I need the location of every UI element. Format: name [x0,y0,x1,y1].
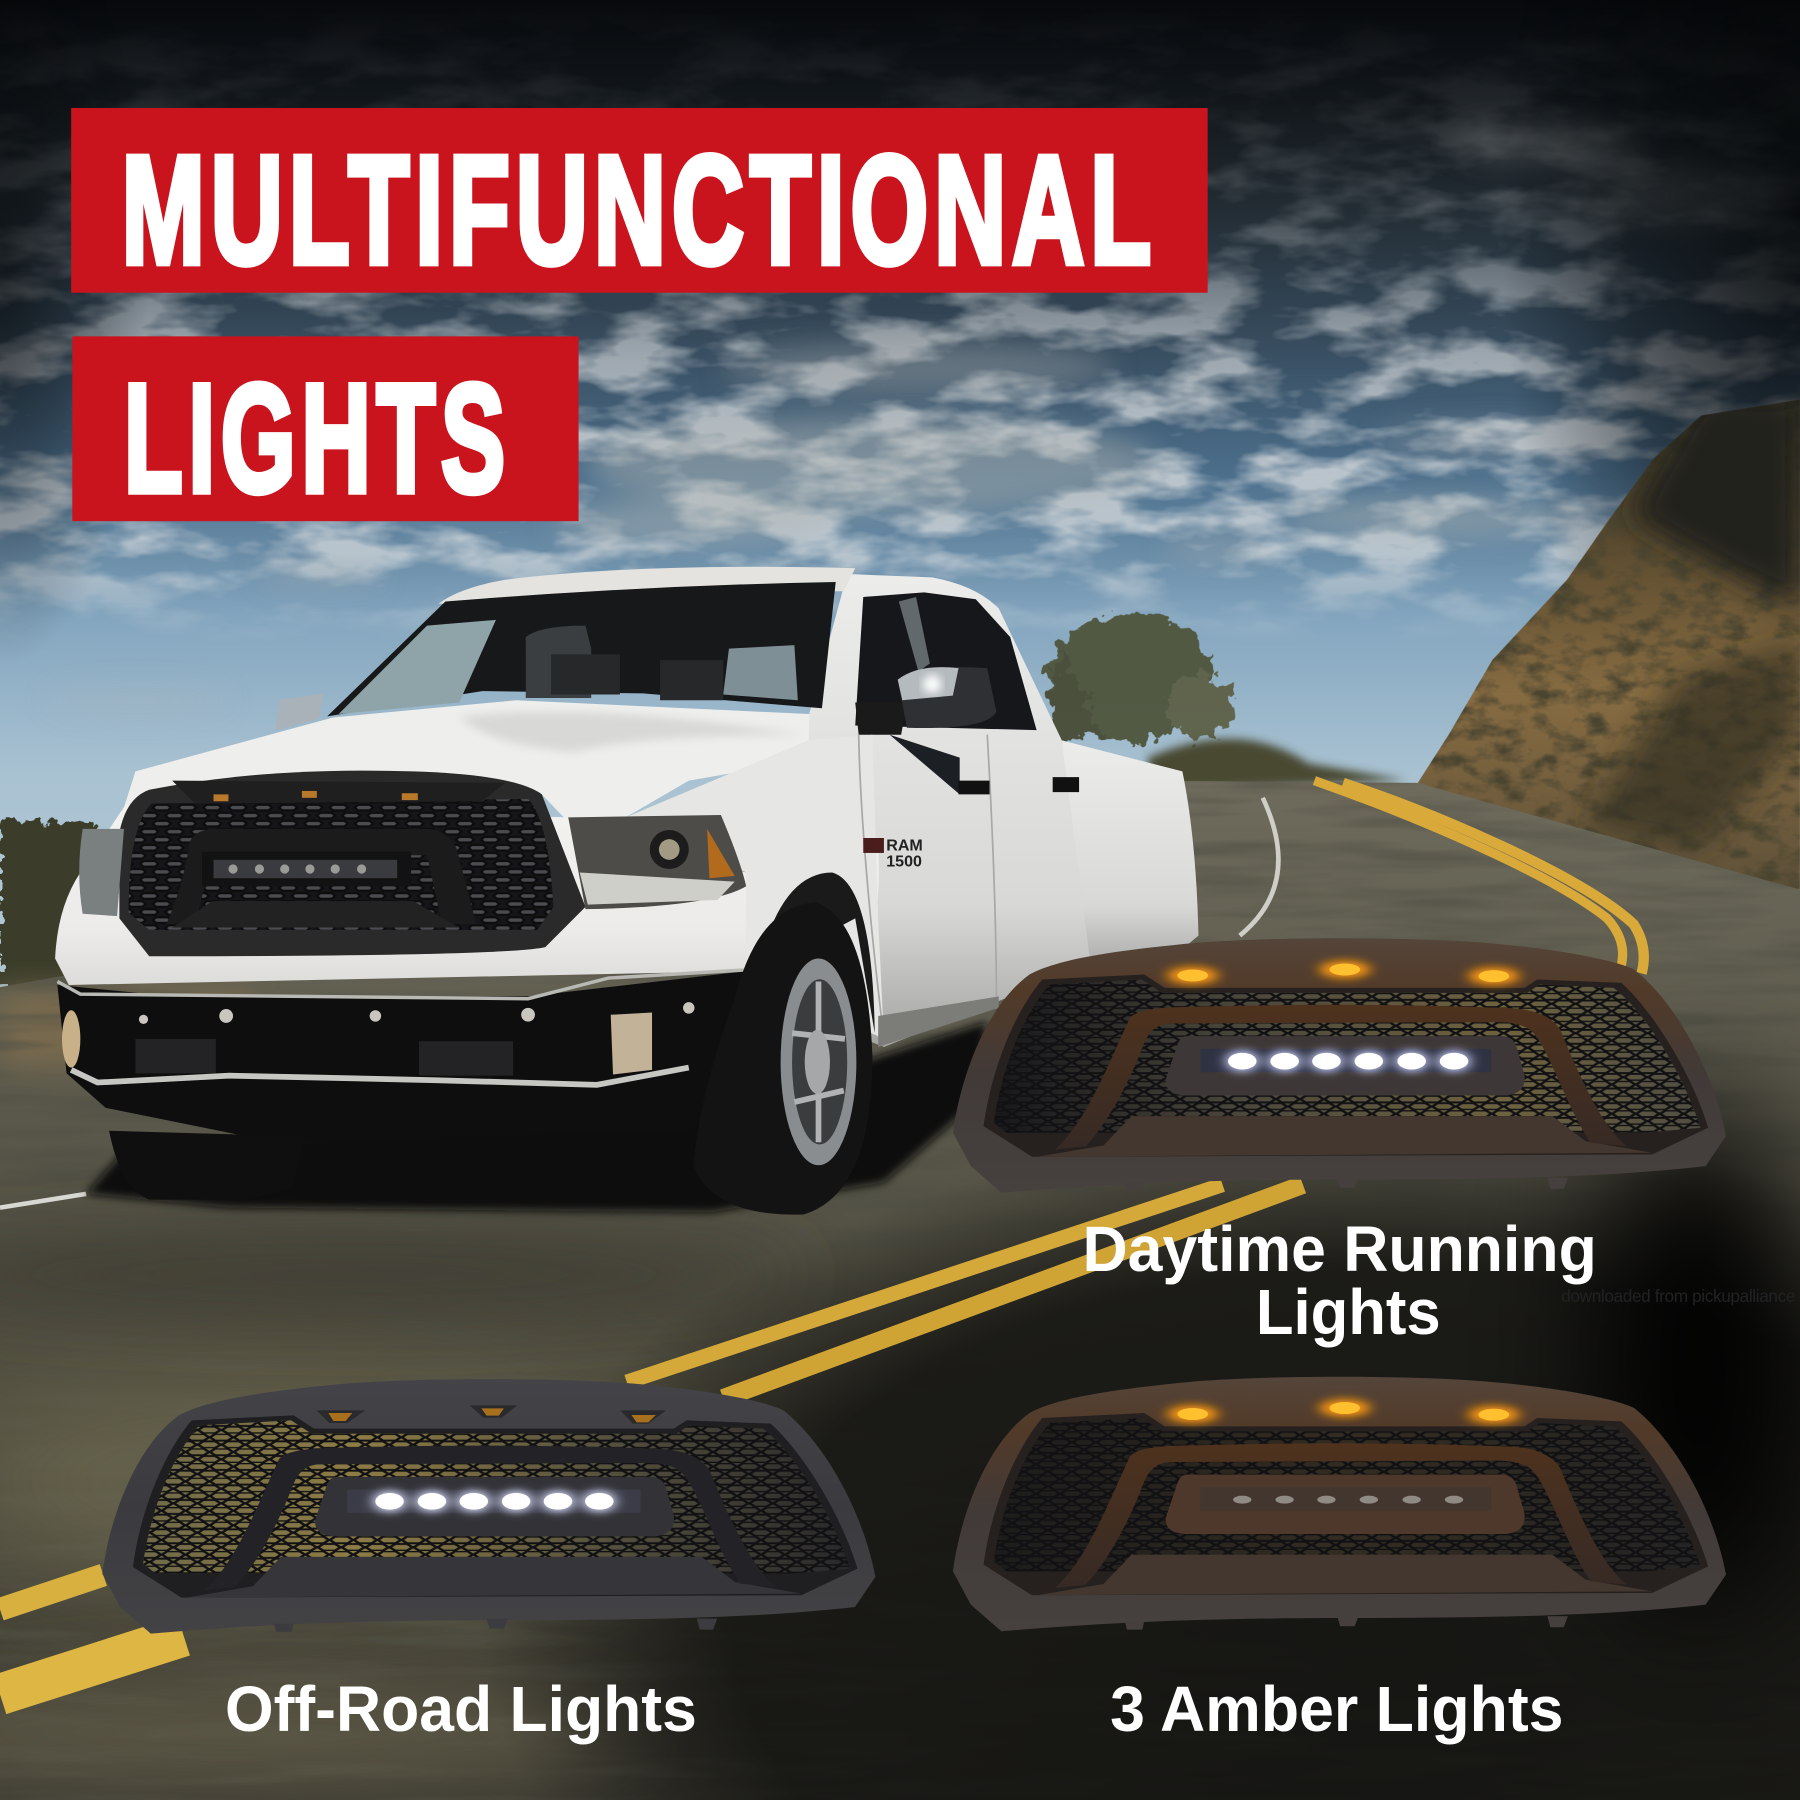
road lighting and shadows [0,1091,1800,1800]
unlit amber markers [317,1405,666,1424]
upper bar [172,781,505,804]
inner rim [984,1413,1708,1595]
honeycomb mesh [994,1418,1700,1571]
arch frame [1055,1443,1626,1588]
truck ground shadow [86,1022,987,1212]
truck grille [119,771,585,956]
sky [0,0,1800,1033]
grille mesh [129,799,553,930]
hood crease shading [459,712,804,752]
door shadow [890,735,960,794]
arch frame [1055,1005,1626,1149]
cab side [804,574,1091,1047]
left mirror [276,693,324,730]
inner arch [166,829,476,924]
side windows [855,592,1037,730]
windshield reflection [339,620,496,714]
lower bar [1037,1116,1652,1157]
grille: three amber lights [953,1377,1726,1631]
side mirror [855,667,996,735]
amber LEDs [1167,1399,1519,1423]
fender and door panels [626,735,884,1039]
white LEDs [373,1491,616,1512]
RAM 1500 badge: 1500 [886,853,922,871]
amber LEDs [1167,961,1519,985]
rear seats [551,654,723,700]
daytime running lights label: Lights [1256,1276,1441,1348]
grille surround [119,771,585,956]
distant trees [0,613,1406,993]
amber marker lights [214,791,418,801]
light housing, unlit [1166,1475,1525,1534]
RAM 1500 badge: RAM [886,837,923,855]
honeycomb mesh [994,980,1700,1133]
front panel [55,804,879,985]
asphalt texture [0,782,1800,1640]
hood [103,700,809,872]
lower valance [172,901,459,928]
inner rim [984,975,1708,1157]
off-road lights label: Off-Road Lights [225,1673,697,1745]
headlight [568,815,746,909]
windshield [327,582,836,716]
hillside [1418,400,1800,890]
clouds [0,54,1800,630]
grille body [102,1379,875,1634]
three amber lights label: 3 Amber Lights [1110,1673,1564,1745]
truck bed [1062,740,1198,976]
arch frame [204,1446,776,1590]
door seam [859,735,996,1039]
RAM 1500 badge [863,837,923,871]
title banner line 2: LIGHTS [124,352,511,524]
lower bar [186,1557,801,1598]
right front tyre [693,902,872,1215]
road markings [0,781,1644,1694]
grille body [953,938,1726,1193]
sky edge vignette [0,0,1800,827]
light bar [202,852,411,886]
wheel rim [781,959,856,1165]
faint watermark text: downloaded from pickupalliance [1561,1286,1795,1306]
road surface [0,781,1800,1800]
bumper chrome [57,970,744,1085]
honeycomb mesh [143,1420,850,1574]
grille: off-road lights [102,1379,875,1634]
left headlight [79,829,124,916]
title banner line 1: MULTIFUNCTIONAL [122,124,1157,296]
unlit LEDs [1233,1496,1463,1504]
light housing [315,1477,674,1536]
daytime running lights label [1083,1213,1597,1348]
grille body [953,1377,1726,1631]
front seats [526,626,591,698]
front bumper [57,971,747,1142]
title banner line 2 [72,336,579,524]
rear wheel [1108,880,1177,991]
truck photo [55,567,1198,1215]
door handles [959,777,1079,794]
left front tyre [109,1131,304,1200]
inner rim [133,1415,857,1598]
title banner line 1 [71,108,1208,296]
daytime running lights label: Daytime Running [1083,1213,1597,1285]
white LEDs [1226,1050,1470,1072]
grille: daytime running lights [953,938,1726,1193]
rocker panel [878,996,999,1047]
roof [439,567,855,604]
light housing [1166,1036,1525,1095]
lower bar [1037,1555,1652,1595]
